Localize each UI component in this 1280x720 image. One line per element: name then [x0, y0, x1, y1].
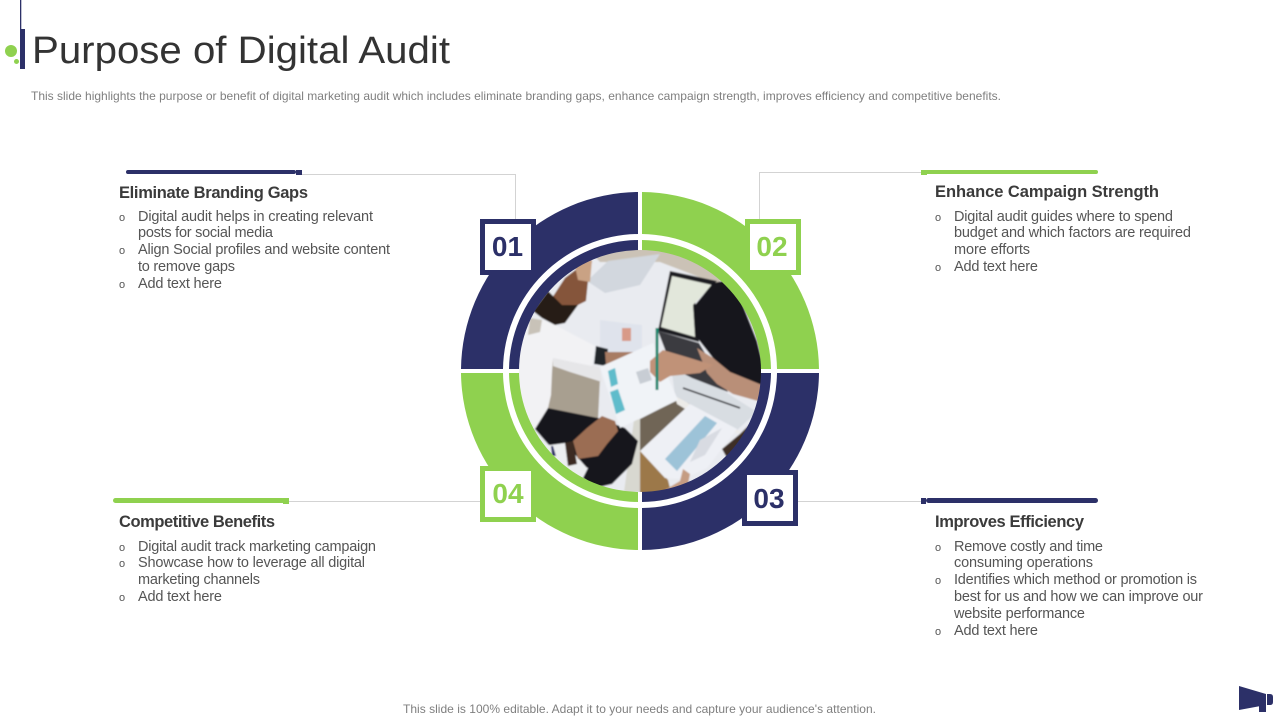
heading 03: Improves Efficiency — [935, 513, 1085, 531]
bullet list 01: Align Social profiles and website content — [138, 242, 390, 258]
bullet list 03: o — [935, 542, 941, 554]
bullet list 02 — [935, 209, 1191, 275]
connector: 03 — [798, 500, 921, 502]
panel: eliminate branding gaps — [119, 170, 390, 292]
bullet list 04: o — [119, 592, 125, 604]
icon: megaphone — [1239, 686, 1273, 712]
bullet list 04: Digital audit track marketing campaign — [138, 539, 376, 555]
connector: 02 — [760, 172, 921, 220]
number box 04 — [482, 468, 534, 520]
bullet list 01: posts for social media — [138, 225, 274, 241]
bullet list 03: consuming operations — [954, 555, 1093, 571]
ring segment: bottom right — [642, 373, 819, 550]
bullet list 03: Add text here — [954, 623, 1038, 639]
bullet list 02: Digital audit guides where to spend — [954, 209, 1173, 225]
bullet list 04: o — [119, 558, 125, 570]
number box 04: 04 — [492, 478, 524, 509]
connector: 01 — [302, 174, 516, 220]
ring segment: top left — [461, 192, 638, 369]
connector: 04 — [289, 500, 480, 502]
heading 02: Enhance Campaign Strength — [935, 183, 1159, 201]
number box 01 — [482, 222, 534, 272]
footer note: This slide is 100% editable. Adapt it to your needs and capture your audience's attention. — [403, 702, 876, 716]
bullet list 02: o — [935, 212, 941, 224]
bullet list 01 — [119, 209, 390, 292]
accent bar 01 — [126, 170, 302, 175]
accent bar 02 — [921, 170, 1098, 175]
photo: two people reviewing charts — [515, 246, 765, 496]
bullet list 03: o — [935, 575, 941, 587]
number box 03: 03 — [753, 483, 785, 514]
heading 01: Eliminate Branding Gaps — [119, 184, 308, 202]
bullet list 04: marketing channels — [138, 572, 260, 588]
number box 02: 02 — [756, 231, 788, 262]
bullet list 04: Showcase how to leverage all digital — [138, 555, 365, 571]
bullet list 01: Digital audit helps in creating relevant — [138, 209, 373, 225]
ring segment: top right — [642, 192, 819, 369]
accent bar 04 — [113, 498, 289, 504]
ring segment: bottom left — [461, 373, 638, 550]
number box 01: 01 — [492, 231, 523, 262]
bullet list 03: Remove costly and time — [954, 539, 1103, 555]
accent bar 03 — [921, 498, 1098, 504]
bullet list 02: budget and which factors are required — [954, 225, 1191, 241]
circular diagram — [461, 192, 819, 550]
bullet list 02: Add text here — [954, 259, 1038, 275]
bullet list 01: o — [119, 279, 125, 291]
bullet list 03: o — [935, 626, 941, 638]
panel: enhance campaign strength — [921, 170, 1191, 275]
bullet list 03: Identifies which method or promotion is — [954, 572, 1197, 588]
bullet list 01: o — [119, 212, 125, 224]
bullet list 03: best for us and how we can improve our — [954, 589, 1203, 605]
bullet list 04 — [119, 539, 376, 605]
title: Purpose of Digital Audit — [32, 30, 450, 72]
bullet list 01: Add text here — [138, 276, 222, 292]
number box 02 — [748, 222, 798, 272]
bullet list 04: Add text here — [138, 589, 222, 605]
bullet list 01: to remove gaps — [138, 259, 235, 275]
panel: competitive benefits — [113, 498, 376, 605]
bullet list 02: o — [935, 262, 941, 274]
number box 03 — [744, 472, 796, 524]
bullet list 04: o — [119, 542, 125, 554]
subtitle: This slide highlights the purpose or benefit of digital marketing audit which includes eliminate branding gaps, enhance campaign strength, improves efficiency and competitive benefits. — [31, 89, 1001, 103]
bullet list 03: website performance — [953, 606, 1085, 622]
bullet list 01: o — [119, 245, 125, 257]
bullet list 03 — [935, 539, 1203, 639]
logo accent — [5, 0, 25, 69]
bullet list 02: more efforts — [954, 242, 1030, 258]
heading 04: Competitive Benefits — [119, 513, 275, 531]
panel: improves efficiency — [921, 498, 1203, 639]
